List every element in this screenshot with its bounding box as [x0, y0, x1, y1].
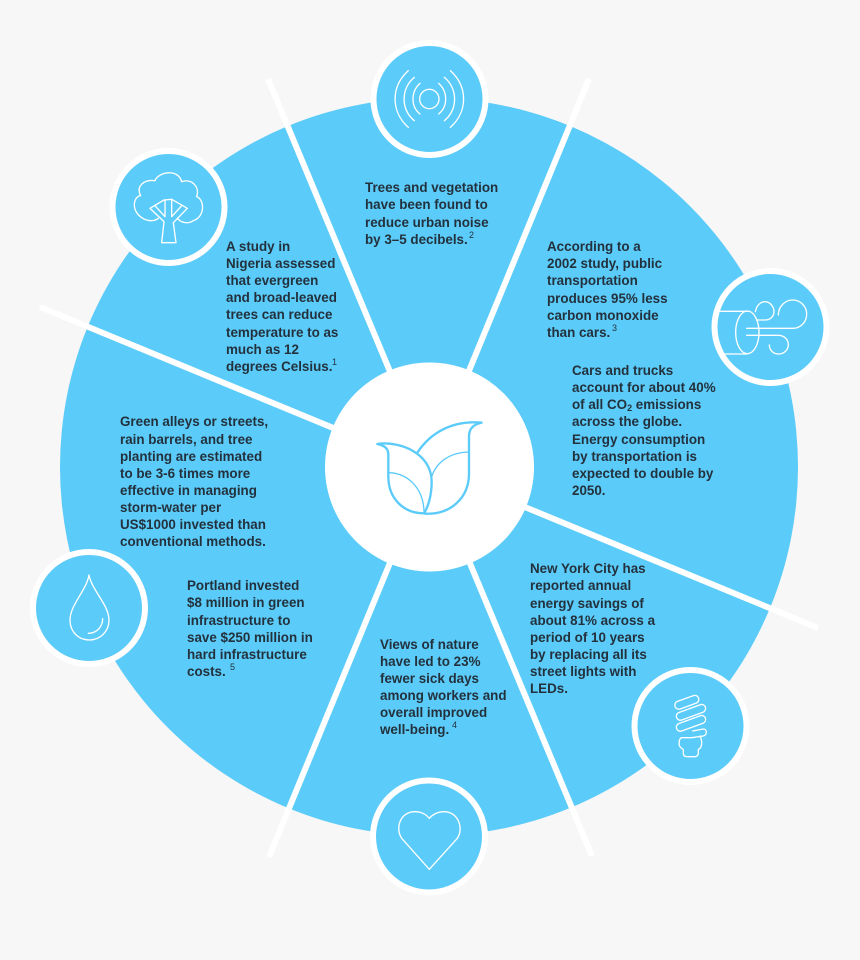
text: Nigeria temperature study: degrees Celsius. [226, 359, 332, 374]
text: Portland: hard infrastructure [187, 647, 307, 662]
text: New York City LEDs: LEDs. [530, 681, 568, 696]
text: green alleys: rain barrels, and tree [120, 432, 252, 447]
text: urban noise: have been found to [365, 197, 488, 212]
text: New York City LEDs: New York City has [530, 561, 646, 576]
text: Portland [187, 578, 313, 679]
text: cars and trucks emissions: emissions [632, 397, 701, 412]
text: green alleys: effective in managing [120, 483, 257, 498]
text: Nigeria temperature study: temperature to as [226, 325, 338, 340]
text: cars and trucks emissions [572, 363, 716, 498]
text: views of nature: among workers and [380, 688, 506, 703]
text: cars and trucks emissions: Cars and trucks [572, 363, 673, 378]
text: green alleys: US$1000 invested than [120, 517, 266, 532]
text: cars and trucks emissions: 2 [627, 403, 632, 413]
text: views of nature: 4 [452, 720, 457, 730]
text: public transportation: According to a [547, 239, 641, 254]
text: cars and trucks emissions: by transportation is [572, 449, 697, 464]
icon: sound waves [374, 43, 486, 155]
text: New York City LEDs: about 81% across a [530, 613, 656, 628]
text: public transportation: carbon monoxide [547, 308, 659, 323]
text: New York City LEDs: reported annual [530, 578, 631, 593]
text: Nigeria temperature study: Nigeria assessed [226, 256, 335, 271]
text: Portland: infrastructure to [187, 613, 290, 628]
text: urban noise: 2 [469, 230, 474, 240]
text: Nigeria temperature study: trees can reduce [226, 307, 332, 322]
text: Nigeria temperature study [226, 239, 338, 374]
text: views of nature: Views of nature [380, 637, 479, 652]
text: New York City LEDs [530, 561, 656, 696]
text: Portland: Portland invested [187, 578, 299, 593]
text: views of nature: overall improved [380, 705, 487, 720]
text: cars and trucks emissions: account for about 40% [572, 380, 716, 395]
center circle with leaf icon [325, 362, 534, 572]
text: cars and trucks emissions: Energy consumption [572, 432, 705, 447]
text: urban noise: reduce urban noise [365, 215, 489, 230]
text: Portland: save $250 million in [187, 630, 313, 645]
text: urban noise: Trees and vegetation [365, 180, 498, 195]
icon: wind [714, 271, 826, 383]
text: Nigeria temperature study: A study in [226, 239, 290, 254]
text: New York City LEDs: by replacing all its [530, 647, 647, 662]
text: green alleys: storm-water per [120, 500, 222, 515]
text: cars and trucks emissions: across the globe. [572, 414, 682, 429]
text: views of nature: fewer sick days [380, 671, 479, 686]
text: Portland: costs. [187, 664, 226, 679]
text: New York City LEDs: energy savings of [530, 596, 644, 611]
text: public transportation: than cars. [547, 325, 610, 340]
segment divider lines [40, 79, 818, 857]
text: urban noise [365, 180, 498, 247]
text: views of nature: well-being. [379, 722, 449, 737]
icon: heart [373, 780, 485, 892]
text: public transportation: produces 95% less [547, 291, 668, 306]
text: New York City LEDs: period of 10 years [530, 630, 645, 645]
main blue circle [60, 98, 798, 836]
icon: tree [112, 151, 224, 263]
text: public transportation [547, 239, 668, 340]
text: Portland: 5 [230, 662, 235, 672]
text: green alleys: to be 3-6 times more [120, 466, 250, 481]
text: New York City LEDs: street lights with [530, 664, 636, 679]
text: views of nature: have led to 23% [380, 654, 481, 669]
text: Nigeria temperature study: 1 [332, 357, 337, 367]
text: green alleys: Green alleys or streets, [120, 414, 268, 429]
text: cars and trucks emissions: expected to double by [572, 466, 714, 481]
text: Nigeria temperature study: that evergreen [226, 273, 318, 288]
icon: light bulb [634, 670, 746, 782]
text: green alleys: planting are estimated [120, 449, 262, 464]
text: cars and trucks emissions: 2050. [572, 483, 606, 498]
text: public transportation: 2002 study, public [547, 256, 663, 271]
text: Nigeria temperature study: much as 12 [226, 342, 299, 357]
text: public transportation: transportation [547, 273, 638, 288]
text: cars and trucks emissions: of all CO [572, 397, 627, 412]
text: Portland: $8 million in green [187, 595, 305, 610]
text: green alleys [120, 414, 268, 549]
text: Nigeria temperature study: and broad-leaved [226, 290, 337, 305]
text: public transportation: 3 [612, 323, 617, 333]
text: views of nature [379, 637, 506, 737]
icon: water drop [33, 552, 145, 664]
text: green alleys: conventional methods. [120, 534, 266, 549]
text: urban noise: by 3–5 decibels. [365, 232, 468, 247]
